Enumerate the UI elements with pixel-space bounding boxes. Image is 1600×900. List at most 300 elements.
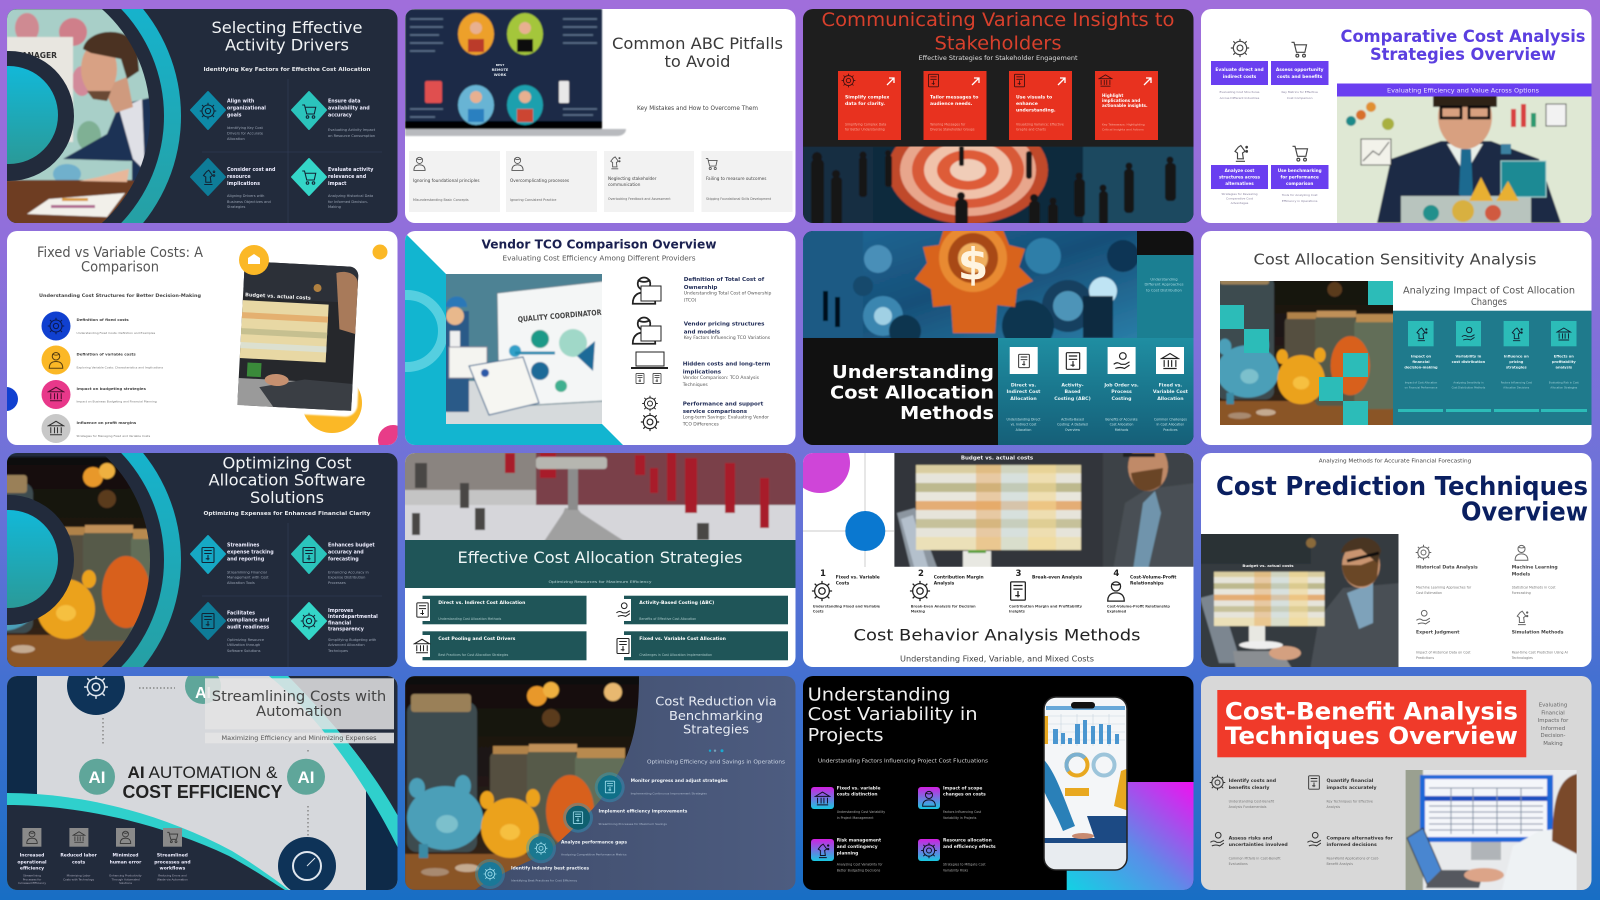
headline: AI automation and cost efficiency: COST EFFICIENCY	[122, 781, 283, 802]
item: influence on pricing strategies: Influence on	[1504, 354, 1529, 358]
title: Communicating Variance Insights to	[822, 10, 1174, 31]
item: assess risks: uncertainties involved	[1229, 842, 1288, 848]
item: risk management: and contingency	[837, 844, 878, 850]
subtitle: Analyzing Impact of Cost Allocation	[1403, 285, 1575, 296]
item: impact of scope changes	[918, 785, 986, 820]
item: hidden costs	[631, 352, 770, 388]
item: minimized human error: Enhancing Productivity	[109, 874, 142, 878]
panel: optimizing cost allocation software	[0, 390, 398, 730]
item: impact on budgeting strategies	[42, 380, 157, 409]
teal side panel: to Cost Distribution	[1146, 288, 1183, 292]
item: performance and support: Long-term Savings: Evaluating Vendor	[683, 415, 769, 421]
image: laptop with remote work screen: REMOTE	[492, 68, 509, 72]
title: Cost Behavior Analysis Methods	[854, 626, 1140, 645]
item: facilitates compliance: Optimizing Resource	[227, 638, 265, 642]
item: streamlines expense tracking	[191, 536, 274, 585]
item: evaluate activity relevance and impact: Evaluate activity	[328, 167, 374, 173]
card: overcomplicating processes	[506, 151, 597, 212]
item: streamlined processes: Reducing Errors and	[158, 874, 187, 878]
subtitle: Optimizing Efficiency and Savings in Operations	[647, 759, 785, 765]
item: impact on financial decision-making: decision-making	[1404, 365, 1438, 369]
item: simulation methods	[1511, 611, 1568, 660]
photo: analyst with dashboards	[1337, 96, 1592, 223]
item: minimized human error: Minimized	[113, 853, 138, 859]
tablet with budget photo: Budget vs. actual costs	[245, 292, 311, 302]
item: job order vs process: Cost Allocation	[1110, 422, 1133, 426]
title banner	[205, 678, 394, 729]
title: Cost Prediction Techniques	[1216, 472, 1588, 502]
item: vendor pricing structures: and models	[684, 329, 721, 335]
item: identify costs: benefits clearly	[1229, 785, 1269, 791]
item: definition of variable costs	[42, 346, 163, 374]
red title banner: Techniques Overview	[1225, 722, 1518, 750]
item 3: break-even: Contribution Margin and Profitability	[1009, 604, 1083, 608]
phone with charts	[1044, 697, 1129, 870]
item: vendor pricing structures	[633, 318, 771, 344]
subtitle: Optimizing Resources for Maximum Efficiency	[548, 579, 652, 584]
item: effects on profitability analysis: profitability	[1552, 360, 1576, 364]
item 4: cost-volume-profit: Relationships	[1130, 581, 1164, 587]
item 2: contribution margin	[910, 569, 984, 613]
item: fixed vs variable costs distinction	[811, 785, 885, 820]
AI badge left	[79, 759, 115, 795]
card: simplify complex data: Simplify complex	[845, 94, 889, 100]
decorative circles and lines	[790, 433, 894, 567]
item: increased operational efficiency: Increased	[20, 853, 44, 859]
bar: activity-based costing	[615, 596, 788, 624]
photo: piggy banks	[1220, 281, 1393, 425]
item: influence on pricing strategies: Factors Influencing Cost	[1501, 381, 1532, 385]
item: expert judgment: Expert Judgment	[1416, 630, 1460, 636]
title: Strategies Overview	[1370, 45, 1556, 64]
item: performance and support: TCO Differences	[682, 422, 719, 428]
item: performance and support: service comparisons	[683, 409, 748, 415]
block: analyze cost structures	[1211, 146, 1268, 205]
item: compare alternatives: Real-World Applications of Cost-	[1326, 857, 1380, 861]
card: use visuals: Graphs and Charts	[1016, 128, 1046, 132]
panel: fixed vs variable costs	[0, 231, 408, 455]
panel: comparative cost analysis	[1201, 9, 1596, 226]
item 1: fixed vs variable	[812, 569, 881, 613]
item: enhances budget accuracy: Expense Distribution	[328, 575, 365, 579]
item: resource allocation: Resource allocation	[943, 838, 992, 844]
item: definition of total cost of ownership	[633, 277, 772, 304]
title	[208, 453, 366, 507]
panel: communicating variance insights	[803, 9, 1194, 227]
item: impact on financial decision-making: on Financial Performance	[1405, 385, 1438, 389]
subtitle: Changes	[1471, 297, 1507, 308]
item: definition of variable costs: Exploring Variable Costs: Characteristics and Implications	[76, 365, 163, 369]
subtitle: Identifying Key Factors for Effective Cost Allocation	[204, 67, 371, 73]
item: monitor progress: Implementing Continuous Improvement Strategies	[631, 792, 707, 796]
panel: cost allocation sensitivity analysis	[1201, 231, 1592, 445]
bar: direct vs indirect: Understanding Cost Allocation Methods	[438, 617, 502, 621]
item: historical data analysis	[1416, 545, 1478, 595]
card: highlight implications: implications and	[1102, 98, 1140, 103]
item 2: contribution margin: Making	[911, 609, 926, 613]
item: align with organizational goals: Allocation	[227, 137, 245, 141]
subtitle strip: Evaluating Efficiency and Value Across Options	[1387, 88, 1539, 94]
card: tailor messages: Tailor messages to	[930, 94, 978, 100]
item: resource allocation: Variability Risks	[943, 868, 968, 872]
item: evaluate activity relevance and impact: for Informed Decision-	[328, 200, 369, 204]
title	[37, 245, 203, 276]
item: reduced labor costs: Reduced labor	[60, 853, 98, 859]
red title banner	[1217, 690, 1526, 757]
item: improves interdepartmental transparency: transparency	[328, 627, 365, 633]
background navy strips and circles: AI	[195, 685, 211, 702]
bar: fixed vs variable: Fixed vs. Variable Cost Allocation	[639, 636, 726, 642]
item: streamlines expense tracking: Allocation Tools	[227, 581, 255, 585]
item: align with organizational goals: goals	[227, 112, 242, 118]
panel: cost reduction via benchmarking	[405, 676, 796, 890]
item 3: break-even: Insights	[1009, 609, 1025, 613]
item: fixed vs variable: Common Challenges	[1154, 418, 1187, 422]
card: highlight implications: Critical Insights and Actions	[1102, 128, 1144, 132]
title: to Avoid	[664, 52, 730, 71]
item: compare alternatives: informed decisions	[1326, 842, 1377, 848]
item: quantify financial impacts: impacts accurately	[1326, 785, 1377, 791]
item: compare alternatives	[1307, 832, 1393, 866]
title: Projects	[808, 725, 884, 746]
item: influence on pricing strategies	[1494, 321, 1539, 412]
subtitle banner	[205, 733, 394, 743]
item 3: break-even: Break-even Analysis	[1032, 574, 1083, 580]
bar: cost pooling	[414, 631, 586, 660]
card: ignoring foundational principles	[409, 151, 500, 212]
block: use benchmarking: Efficiency in Operations	[1282, 199, 1318, 203]
title	[655, 694, 777, 736]
block: analyze cost structures: Advantages	[1231, 201, 1249, 205]
item: evaluate activity relevance and impact	[292, 159, 374, 209]
item: risk management: Better Budgeting Decisions	[837, 868, 881, 872]
item: machine learning models: Machine Learning	[1512, 564, 1558, 570]
item: direct vs indirect: Allocation	[1010, 396, 1037, 402]
title	[808, 685, 978, 746]
item: expert judgment	[1416, 610, 1471, 660]
item: enhances budget accuracy	[292, 536, 375, 585]
title: Comparison	[81, 260, 159, 276]
AI badge right: AI	[298, 768, 314, 787]
card: simplify complex data: Simplifying Complex Data	[845, 122, 886, 126]
item: streamlines expense tracking: Streamlines	[227, 543, 260, 549]
title banner: Streamlining Costs with	[212, 689, 386, 705]
title: Vendor TCO Comparison Overview	[482, 237, 717, 252]
block: evaluate direct and indirect costs: indirect costs	[1223, 74, 1257, 80]
item 3: break-even: 3	[1015, 569, 1021, 579]
bottom dark curve	[7, 793, 289, 890]
subtitle: Key Mistakes and How to Overcome Them	[637, 106, 758, 112]
title: Cost Allocation	[830, 383, 994, 403]
card: overcomplicating processes: Ignoring Consistent Practice	[510, 198, 556, 202]
item: fixed vs variable: Practices	[1163, 428, 1178, 432]
title	[212, 21, 362, 54]
item: minimized human error: Solutions	[119, 881, 132, 885]
headline: AI automation and cost efficiency	[122, 764, 283, 802]
item: improves interdepartmental transparency: Techniques	[327, 649, 348, 653]
item: consider cost and resource implications: Aligning Drivers with	[227, 194, 264, 198]
item: enhances budget accuracy: Enhancing Accuracy in	[328, 570, 369, 574]
block: evaluate direct and indirect costs	[1211, 39, 1268, 100]
item: compare alternatives: Compare alternatives for	[1326, 835, 1393, 841]
item: evaluate activity relevance and impact: impact	[328, 181, 347, 187]
item: align with organizational goals	[191, 92, 266, 141]
photo: crowd around target	[803, 146, 1194, 223]
block: evaluate direct and indirect costs: Across Different Industries	[1220, 96, 1260, 100]
card: simplify complex data	[838, 71, 901, 140]
item 4: cost-volume-profit: Cost-Volume-Profit	[1130, 574, 1176, 580]
item 4: cost-volume-profit	[1107, 569, 1176, 613]
item: activity-based costing: Costing: A Detailed	[1057, 422, 1088, 426]
item: impact on financial decision-making: Impact on	[1411, 354, 1432, 358]
photo: board pieces and tower	[405, 453, 796, 540]
item: fixed vs variable: in Cost Allocation	[1157, 422, 1184, 426]
item: fixed vs variable: Variable Cost	[1153, 389, 1189, 395]
item 1: fixed vs variable: Costs	[813, 609, 824, 613]
item: machine learning models: Models	[1512, 571, 1530, 577]
side subtitle: Evaluating	[1539, 703, 1567, 709]
image: laptop with remote work screen: BEST	[496, 63, 505, 67]
item: identify best practices: Identifying Best Practices for Cost Efficiency	[511, 879, 577, 883]
block: analyze cost structures: structures across	[1219, 174, 1261, 180]
panel: effective cost allocation strategies	[402, 450, 799, 667]
item: activity-based costing: Activity-	[1061, 382, 1084, 388]
item: direct vs indirect: Direct vs.	[1011, 382, 1036, 388]
item: ensure data availability and accuracy: on Resource Consumption	[328, 134, 375, 138]
item: enhances budget accuracy: Enhances budget	[328, 543, 375, 549]
block: use benchmarking: comparison	[1286, 181, 1313, 186]
item: monitor progress: Monitor progress and adjust strategies	[631, 778, 728, 784]
photo: piggy banks in arc	[0, 390, 201, 730]
side subtitle: Decision-	[1541, 733, 1565, 739]
item 2: contribution margin: Analysis	[934, 581, 955, 587]
title	[612, 37, 782, 67]
item: definition of fixed costs: Definition of fixed costs	[76, 317, 129, 322]
item: impact on financial decision-making: financial	[1412, 360, 1430, 364]
item: definition of total cost of ownership: Understanding Total Cost of Ownership	[684, 290, 772, 296]
card: simplify complex data: data for clarity.	[845, 101, 885, 107]
item: increased operational efficiency	[17, 828, 47, 885]
photo: analyst at monitor	[1406, 770, 1577, 890]
block: assess opportunity costs: Key Metrics for Effective	[1281, 90, 1318, 94]
item: evaluate activity relevance and impact: relevance and	[328, 174, 367, 180]
item: impact of scope changes: Variability in Projects	[943, 816, 977, 820]
item: impact of scope changes: Impact of scope	[943, 785, 982, 791]
item: align with organizational goals: organizational	[227, 106, 266, 112]
item: enhances budget accuracy: forecasting	[328, 556, 359, 562]
item: job order vs process: Benefits of Accurate	[1105, 418, 1138, 422]
block: assess opportunity costs: costs and benefits	[1277, 74, 1323, 80]
item: consider cost and resource implications: Strategies	[227, 205, 245, 209]
card: failing to measure outcomes	[702, 151, 792, 212]
item: monitor progress	[595, 772, 728, 802]
item: simulation methods: Technologies	[1511, 656, 1533, 660]
item: influence on pricing strategies: strategies	[1506, 365, 1527, 369]
item: facilitates compliance	[191, 603, 270, 653]
item: impact of scope changes: changes on costs	[943, 792, 986, 798]
title: Solutions	[250, 488, 324, 507]
item: hidden costs: Hidden costs and long-term	[683, 362, 770, 368]
item: align with organizational goals: Identifying Key Cost	[227, 126, 264, 130]
bar: activity-based costing: Benefits of Effective Cost Allocation	[639, 617, 696, 621]
side subtitle: Financial	[1541, 711, 1565, 717]
item: increased operational efficiency: efficiency	[20, 865, 44, 871]
panel: understanding cost allocation methods	[800, 224, 1194, 445]
item: streamlines expense tracking: expense tracking	[227, 549, 274, 555]
item: reduced labor costs: Minimizing Labor	[67, 874, 91, 878]
block: analyze cost structures: Strategies for Revealing	[1221, 192, 1258, 196]
card: tailor messages: audience needs.	[930, 101, 973, 107]
card: simplify complex data: for Better Understanding	[845, 128, 885, 132]
item: quantify financial impacts: Key Techniques for Effective	[1326, 799, 1373, 803]
item: facilitates compliance: Software Solutions	[227, 649, 261, 653]
headline: AI automation and cost efficiency: AI AUTOMATION &	[128, 764, 278, 782]
item: assess risks: Assess risks and	[1229, 835, 1272, 841]
card: tailor messages: Tailoring Messages for	[929, 122, 966, 126]
panel: cost behavior analysis methods	[790, 433, 1196, 667]
subtitle: Understanding Cost Structures for Better Decision-Making	[39, 293, 201, 299]
item: influence on profit margins: Strategies for Managing Fixed and Variable Costs	[76, 434, 151, 438]
item: enhances budget accuracy: Processes	[328, 581, 346, 585]
bar: fixed vs variable: Challenges in Cost Allocation Implementation	[639, 653, 712, 657]
item: improves interdepartmental transparency: financial	[328, 620, 351, 626]
card: use visuals: enhance	[1016, 101, 1038, 107]
item: job order vs process: Job Order vs.	[1103, 382, 1139, 388]
card: use visuals: Visualizing Variance: Effective	[1016, 122, 1064, 126]
bar: direct vs indirect	[415, 596, 586, 624]
navy gauge circle	[278, 837, 336, 895]
subtitle: Evaluating Cost Efficiency Among Different Providers	[502, 254, 696, 262]
side subtitle: Informed	[1541, 726, 1565, 732]
item: fixed vs variable: Allocation	[1157, 396, 1184, 402]
item: improves interdepartmental transparency	[292, 603, 378, 653]
item: job order vs process: Methods	[1115, 428, 1129, 432]
item: analyze performance gaps: Analyzing Competitive Performance Metrics	[561, 852, 627, 856]
block: use benchmarking: Tools for Analyzing Cost	[1281, 193, 1318, 197]
item: vendor pricing structures: Vendor pricing structures	[684, 322, 765, 328]
photo: quality coordinator certificate	[443, 271, 605, 427]
item 1: fixed vs variable: 1	[820, 569, 826, 579]
subtitle: Optimizing Expenses for Enhanced Financial Clarity	[204, 511, 371, 517]
item: machine learning models: Statistical Methods in Cost	[1512, 585, 1556, 589]
item: identify costs: Understanding Cost-Benefit	[1229, 799, 1275, 803]
card: highlight implications: Key Takeaways: Highlighting	[1102, 122, 1145, 126]
block: analyze cost structures: alternatives	[1225, 181, 1254, 186]
bar: activity-based costing: Activity-Based Costing (ABC)	[639, 600, 714, 606]
title: Understanding	[832, 363, 994, 383]
item: consider cost and resource implications	[191, 159, 276, 209]
item 2: contribution margin: 2	[918, 569, 924, 579]
item 1: fixed vs variable: Fixed vs. Variable	[836, 574, 880, 580]
image: laptop with remote work screen	[405, 9, 626, 136]
subtitle: Analyzing Methods for Accurate Financial Forecasting	[1319, 458, 1471, 464]
item: reduced labor costs	[60, 828, 98, 881]
title: Cost Allocation Sensitivity Analysis	[1254, 250, 1537, 268]
item: activity-based costing	[1054, 347, 1091, 432]
item: influence on profit margins: Influence on profit margins	[76, 420, 137, 425]
photo: budget table and analyst: Budget vs. actual costs	[961, 455, 1034, 461]
card: neglecting stakeholder communication: Neglecting stakeholder	[608, 176, 657, 181]
bar: fixed vs variable	[615, 631, 788, 660]
item: align with organizational goals: Align with	[227, 98, 255, 104]
item: impact on budgeting strategies: Impact on budgeting strategies	[76, 386, 147, 391]
block: analyze cost structures: Comparative Cost	[1226, 196, 1254, 200]
card: highlight implications	[1095, 71, 1158, 140]
item: ensure data availability and accuracy: Evaluating Activity Impact	[328, 128, 376, 132]
item: direct vs indirect: vs. Indirect Cost	[1011, 422, 1037, 426]
item: implement efficiency improvements: Streamlining Processes for Maximum Savings	[598, 822, 667, 826]
item: align with organizational goals: Drivers for Accurate	[227, 132, 264, 136]
item: definition of variable costs: Definition of variable costs	[76, 352, 136, 357]
card: neglecting stakeholder communication	[604, 151, 694, 212]
card: use visuals: understanding.	[1016, 108, 1056, 114]
item: activity-based costing: Based	[1064, 389, 1081, 395]
item: activity-based costing: Activity-Based	[1061, 418, 1084, 422]
item: job order vs process: Costing	[1112, 396, 1132, 402]
teal frame shape	[371, 233, 623, 445]
card: neglecting stakeholder communication: communication	[608, 182, 641, 187]
title: Understanding	[808, 685, 951, 706]
item: quantify financial impacts: Quantify financial	[1326, 778, 1374, 784]
side subtitle: Making	[1543, 741, 1563, 747]
block: use benchmarking: Use benchmarking	[1278, 168, 1322, 173]
item: minimized human error: human error	[110, 859, 142, 865]
item 2: contribution margin: Contribution Margin	[934, 574, 984, 580]
item: definition of fixed costs: Understanding Fixed Costs: Definition and Examples	[76, 331, 156, 335]
teal squares	[1220, 281, 1393, 425]
item: streamlined processes	[154, 828, 191, 881]
item 3: break-even	[1009, 569, 1083, 613]
item: effects on profitability analysis: Allocation Strategies	[1550, 385, 1578, 389]
item: resource allocation	[918, 838, 996, 872]
item: impact on financial decision-making: Impact of Cost Allocation	[1405, 381, 1438, 385]
image: laptop with remote work screen: WORK	[494, 73, 506, 77]
item: machine learning models	[1512, 545, 1558, 595]
title: Cost Reduction via	[655, 694, 777, 709]
item: simulation methods: Simulation Methods	[1512, 630, 1564, 636]
item: definition of total cost of ownership: (TCO)	[684, 298, 697, 304]
card: failing to measure outcomes: Failing to measure outcomes	[706, 176, 766, 181]
item: facilitates compliance: compliance and	[227, 618, 270, 624]
card: use visuals	[1009, 71, 1072, 140]
item: consider cost and resource implications: Business Objectives and	[227, 200, 271, 204]
item: definition of total cost of ownership: Definition of Total Cost of	[684, 277, 765, 283]
photo: manager at desk: MANAGER	[14, 51, 57, 60]
item: effects on profitability analysis	[1541, 321, 1587, 412]
item: facilitates compliance: Facilitates	[227, 611, 255, 617]
item: minimized human error	[109, 828, 142, 885]
photo: manager at desk	[7, 9, 181, 223]
item: reduced labor costs: Costs with Technology	[63, 877, 94, 881]
subtitle: Understanding Factors Influencing Project Cost Fluctuations	[818, 758, 988, 764]
block: assess opportunity costs: Cost Comparison	[1287, 96, 1313, 100]
item: consider cost and resource implications: Consider cost and	[227, 167, 276, 173]
item: implement efficiency improvements: Implement efficiency improvements	[598, 809, 688, 815]
item: streamlined processes: processes and	[154, 859, 191, 865]
item: risk management: Risk management	[837, 838, 881, 844]
panel: understanding cost variability	[803, 676, 1194, 890]
bar: direct vs indirect: Direct vs. Indirect Cost Allocation	[438, 600, 525, 606]
item 1: fixed vs variable: Understanding Fixed and Variable	[813, 604, 881, 608]
item: fixed vs variable	[1153, 347, 1189, 432]
item: identify costs: Identify costs and	[1229, 778, 1276, 784]
block: assess opportunity costs	[1271, 42, 1328, 100]
item: consider cost and resource implications: resource	[227, 174, 251, 180]
block: evaluate direct and indirect costs: Evaluate direct and	[1215, 67, 1264, 73]
side subtitle: Impacts for	[1538, 718, 1569, 724]
card: use visuals: Use visuals to	[1016, 94, 1052, 100]
item: hidden costs: Techniques	[682, 382, 708, 388]
